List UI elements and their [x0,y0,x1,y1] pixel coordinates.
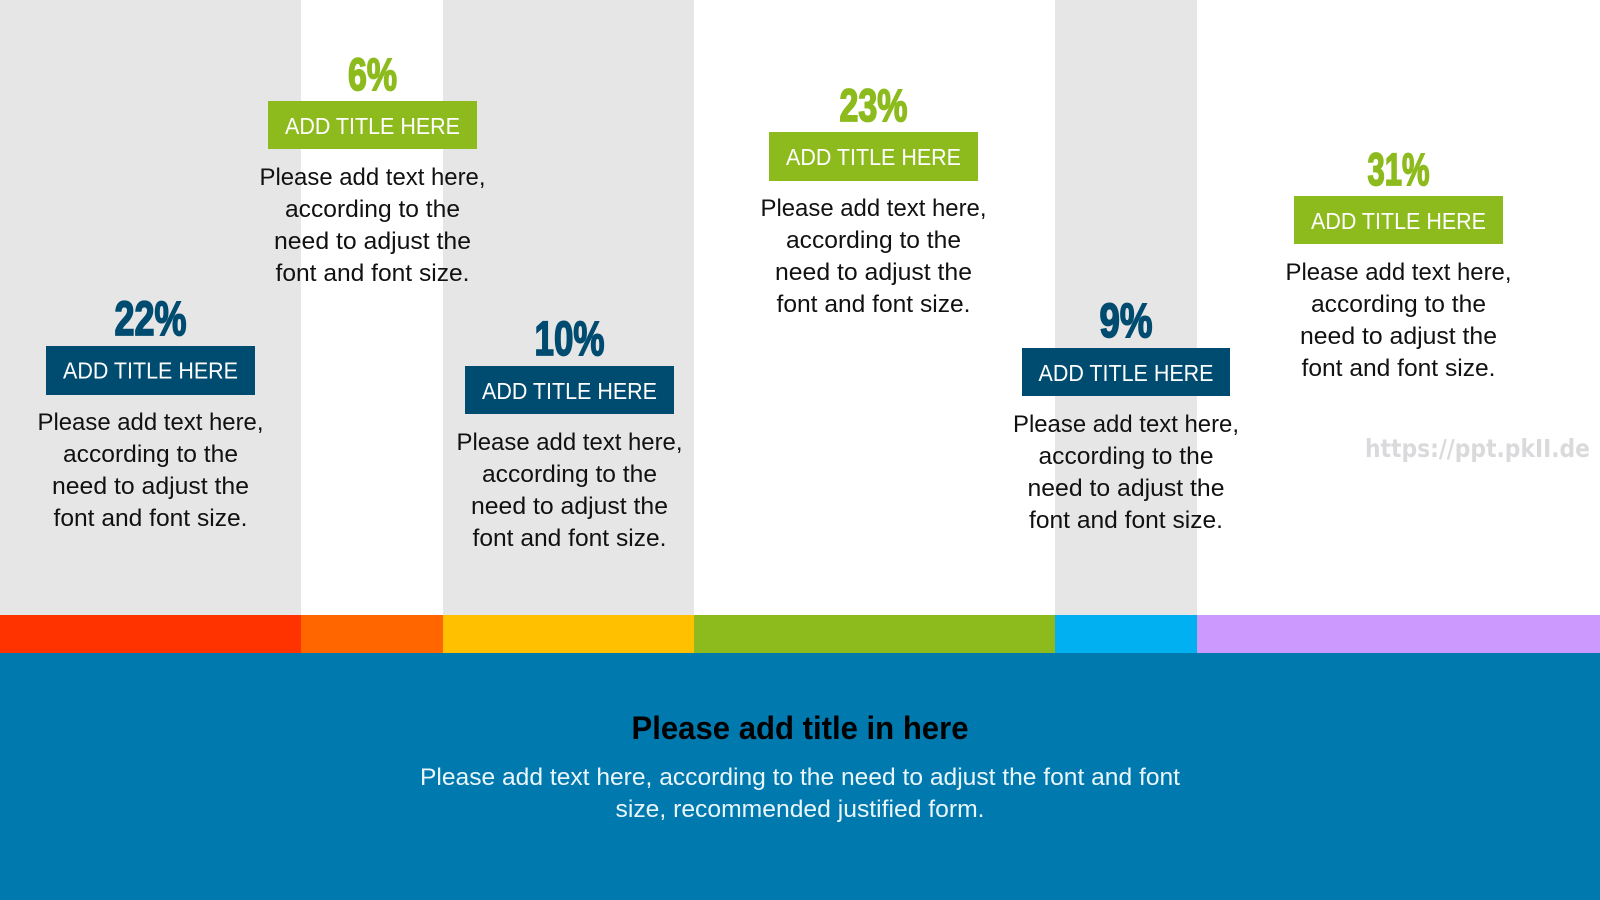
panel: 23% column [760,80,986,318]
percentage: 22%: 22% [114,293,186,346]
summary text: size, recommended justified form. [616,796,984,823]
body text: font and font size. [776,291,970,318]
summary heading: Please add title in here [632,710,968,746]
panel: 9% column [1013,295,1239,534]
body text: font and font size. [1302,355,1496,382]
title box [1294,196,1503,244]
title box: ADD TITLE HERE [63,358,238,384]
title box: ADD TITLE HERE [482,378,657,404]
title box: ADD TITLE HERE [1038,360,1214,386]
percentage: 10%: 10% [534,313,604,366]
body text: Please add text here, [456,429,682,456]
title box: ADD TITLE HERE [285,113,460,139]
title box [46,346,255,395]
body text: font and font size. [1029,507,1223,534]
percentage: 31%: 31% [1368,144,1430,195]
title box: ADD TITLE HERE [1311,208,1486,234]
body text: need to adjust the [471,493,668,520]
color bar [0,615,1600,653]
body text: according to the [285,196,460,223]
title box [465,366,674,414]
body text: need to adjust the [1028,475,1224,502]
body text [260,164,486,287]
panel: 31% column [1286,144,1512,382]
panel: 10% column [456,313,682,552]
body text [38,409,264,532]
title box [1022,348,1230,396]
body text [760,195,986,318]
body text: according to the [1311,291,1486,318]
percentage: 23%: 23% [840,80,908,131]
percentage: 6%: 6% [348,49,397,100]
body text: need to adjust the [775,259,972,286]
body text: Please add text here, [260,164,486,191]
body text: need to adjust the [1300,323,1497,350]
body text: need to adjust the [52,473,249,500]
panel: 22% column [38,293,264,532]
body text: Please add text here, [38,409,264,436]
body text: Please add text here, [760,195,986,222]
body text: according to the [482,461,657,488]
body text: according to the [1038,443,1214,470]
body text: font and font size. [54,505,248,532]
body text: need to adjust the [274,228,471,255]
title box: ADD TITLE HERE [786,144,961,170]
body text [1013,411,1239,534]
body text: font and font size. [276,260,470,287]
summary text [420,764,1180,823]
panel: bottom summary [0,653,1600,900]
body text: Please add text here, [1013,411,1239,438]
body text [456,429,682,552]
title box [268,101,477,149]
body text: according to the [63,441,238,468]
panel: 6% column [260,49,486,287]
body text [1286,259,1512,382]
body text: font and font size. [472,525,666,552]
percentage: 9%: 9% [1100,295,1152,348]
summary text: Please add text here, according to the need to adjust the font and font [420,764,1180,791]
body text: according to the [786,227,961,254]
body text: Please add text here, [1286,259,1512,286]
title box [769,132,978,181]
